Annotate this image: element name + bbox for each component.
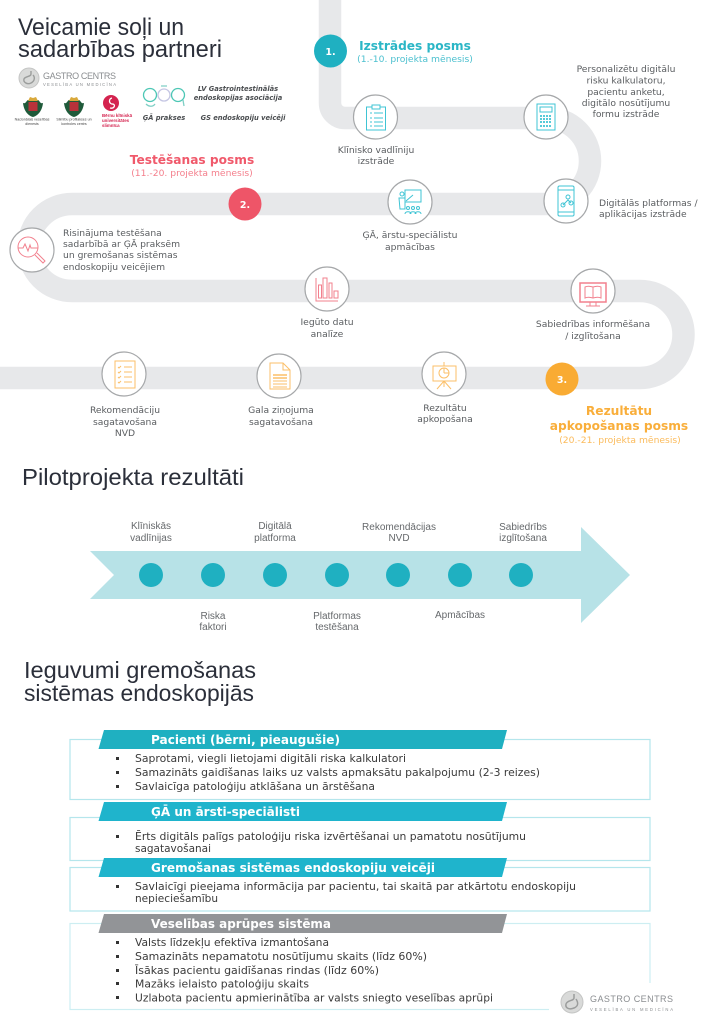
label: training: apmācības <box>385 242 435 253</box>
timeline labels: Apmācības <box>435 610 485 621</box>
title: steps and partners: Veicamie soļi un <box>18 14 184 41</box>
partner caption: association: LV Gastrointestinālās <box>198 85 278 93</box>
banner: healthcare system: Veselības aprūpes sistēma <box>151 916 331 931</box>
label: results summary: Rezultātu <box>423 403 467 414</box>
timeline labels: Klīniskās <box>131 521 171 532</box>
list: GPs and specialists: sagatavošanai <box>135 843 211 855</box>
label: clinical guidelines: izstrāde <box>358 156 395 167</box>
panel: patients <box>70 730 650 800</box>
phase 1 marker: 1. <box>325 47 336 58</box>
panel: GPs and specialists <box>70 802 650 860</box>
phase 1 marker <box>314 34 347 68</box>
list: patients: Samazināts gaidīšanas laiks uz valsts apmaksātu pakalpojumu (2-3 reizes) <box>135 767 540 779</box>
panel: endoscopists <box>70 858 650 911</box>
timeline labels: Sabiedrībs <box>499 522 547 533</box>
label: public education: / izglītošana <box>565 331 621 342</box>
label: results summary <box>417 403 473 425</box>
heading: benefits: sistēmas endoskopijās <box>24 680 254 706</box>
banner: endoscopists <box>98 858 507 877</box>
label: clinical guidelines: Klīnisko vadlīniju <box>338 145 414 156</box>
timeline labels <box>130 521 547 633</box>
label: public education: Sabiedrības informēšana <box>536 319 650 330</box>
icon: bar chart analysis <box>305 267 349 311</box>
partner caption: endoscopists: GS endoskopiju veicēji <box>201 114 286 122</box>
phase 3 heading: apkopošanas posms <box>550 419 688 433</box>
label: solution testing <box>63 228 180 273</box>
icon: clinical guidelines <box>354 95 398 139</box>
label: recommendations: Rekomendāciju <box>90 405 160 416</box>
phase 2 heading: Testēšanas posms <box>130 153 254 167</box>
banner: GPs and specialists: ĢĀ un ārsti-speciālisti <box>151 804 300 819</box>
logo: Slimību profilakses un kontroles centrs: Slimību profilakses un <box>56 118 92 122</box>
logo: Nacionālais veselības dienests: dienests <box>25 122 39 126</box>
phase 2 heading: (11.-20. projekta mēnesis) <box>131 168 253 179</box>
logo: Bērnu klīniskā universitātes slimnīca: Bērnu klīniskā <box>102 113 133 118</box>
list: GPs and specialists <box>116 830 526 855</box>
logo: Gastro Centrs footer: VESELĪBA UN MEDICĪNA <box>590 1007 673 1012</box>
label: data analysis: analīze <box>311 329 344 340</box>
logo: Bērnu klīniskā universitātes slimnīca <box>102 95 133 128</box>
list: endoscopists <box>116 881 576 905</box>
logo: Slimību profilakses un kontroles centrs <box>56 97 92 126</box>
logo: Gastro Centrs: GASTRO CENTRS <box>43 71 116 81</box>
label: data analysis: Iegūto datu <box>300 317 354 328</box>
label: data analysis <box>300 317 354 340</box>
logo: Bērnu klīniskā universitātes slimnīca: universitātes <box>102 118 130 123</box>
list: patients <box>116 753 540 793</box>
list: healthcare system <box>116 937 493 1004</box>
list: endoscopists: nepieciešamību <box>135 893 218 905</box>
label: risk calculator: pacientu anketu, <box>587 87 665 98</box>
list: healthcare system: Valsts līdzekļu efektīva izmantošana <box>135 937 329 949</box>
icon: results presentation <box>422 352 466 396</box>
phase 1 heading: (1.-10. projekta mēnesis) <box>357 54 473 65</box>
timeline labels: Riska <box>200 611 226 622</box>
label: training <box>362 230 458 253</box>
label: recommendations: NVD <box>115 428 135 439</box>
partner caption: association: endoskopijas asociācija <box>194 94 283 102</box>
label: final report: Gala ziņojuma <box>248 405 314 416</box>
label: solution testing: endoskopiju veicējiem <box>63 262 165 273</box>
label: public education <box>536 319 650 342</box>
logo: Gastro Centrs <box>19 68 116 88</box>
list: healthcare system: Mazāks ielaisto patoloģiju skaits <box>135 978 309 990</box>
logo: Nacionālais veselības dienests: Nacionālais veselības <box>15 118 50 122</box>
title: steps and partners: sadarbības partneri <box>18 36 222 63</box>
timeline labels: platforma <box>254 533 296 544</box>
banner: endoscopists: Gremošanas sistēmas endoskopiju veicēji <box>151 860 435 875</box>
icon: recommendations checklist <box>102 352 146 396</box>
phase 2 marker: 2. <box>240 200 250 211</box>
partner logos <box>15 68 286 128</box>
timeline labels: Platformas <box>313 611 361 622</box>
phase 3 heading <box>550 404 688 446</box>
phase 3 marker: 3. <box>557 375 567 386</box>
heading: benefits: Ieguvumi gremošanas <box>24 657 256 683</box>
timeline arrow <box>90 527 630 623</box>
logo: GA rings <box>144 86 184 106</box>
partner caption: association <box>194 85 283 102</box>
timeline labels: Digitālā <box>258 521 292 532</box>
logo: Gastro Centrs footer: GASTRO CENTRS <box>590 994 673 1004</box>
label: solution testing: un gremošanas sistēmas <box>63 250 178 261</box>
label: final report <box>248 405 314 428</box>
label: recommendations <box>90 405 160 439</box>
list: endoscopists: Savlaicīgi pieejama informācija par pacientu, tai skaitā par atkārtotu endoskopiju <box>135 881 576 893</box>
heading: pilot results: Pilotprojekta rezultāti <box>22 464 244 490</box>
title: steps and partners <box>18 14 222 63</box>
panel: healthcare system <box>70 914 650 1010</box>
icon: public education monitor <box>571 269 615 313</box>
partner caption: GP practices: ĢĀ prakses <box>143 113 185 122</box>
banner: patients <box>98 730 507 749</box>
logo: Gastro Centrs footer <box>549 983 689 1015</box>
phase 1 heading <box>357 39 473 65</box>
label: digital platform: Digitālās platformas / <box>599 198 699 209</box>
list: healthcare system: Īsākas pacientu gaidīšanas rindas (līdz 60%) <box>135 964 379 977</box>
label: recommendations: sagatavošana <box>93 417 157 428</box>
icon: final report <box>257 354 301 398</box>
list: patients: Savlaicīga patoloģiju atklāšana un ārstēšana <box>135 781 375 793</box>
phase 3 marker <box>546 362 578 396</box>
timeline labels: vadlīnijas <box>130 533 172 544</box>
label: clinical guidelines <box>338 145 414 167</box>
label: risk calculator <box>577 64 675 120</box>
logo: Slimību profilakses un kontroles centrs: kontroles centrs <box>61 122 87 126</box>
label: training: ĢĀ, ārstu-speciālistu <box>362 230 458 241</box>
list: patients: Saprotami, viegli lietojami digitāli riska kalkulatori <box>135 753 406 765</box>
list: healthcare system: Uzlabota pacientu apmierinātība ar valsts sniegto veselības aprūpi <box>135 992 493 1004</box>
timeline labels: faktori <box>199 622 227 633</box>
timeline labels: testēšana <box>315 622 359 633</box>
phase 3 heading: Rezultātu <box>586 404 652 418</box>
icon: calculator <box>524 95 568 139</box>
label: risk calculator: risku kalkulatoru, <box>586 76 666 86</box>
banner: healthcare system <box>98 914 507 933</box>
icon: phone platform <box>544 179 588 223</box>
label: solution testing: sadarbībā ar ĢĀ praksēm <box>63 239 180 250</box>
phase 2 heading <box>130 153 254 179</box>
logo: Bērnu klīniskā universitātes slimnīca: slimnīca <box>102 123 120 128</box>
label: risk calculator: digitālo nosūtījumu <box>582 98 670 109</box>
timeline dots <box>139 563 533 587</box>
label: risk calculator: Personalizētu digitālu <box>577 64 675 75</box>
phase 2 marker <box>228 188 262 220</box>
logo: Gastro Centrs: VESELĪBA UN MEDICĪNA <box>43 82 116 87</box>
timeline labels: NVD <box>388 533 410 544</box>
label: risk calculator: formu izstrāde <box>593 109 660 120</box>
list: GPs and specialists: Ērts digitāls palīgs patoloģiju riska izvērtēšanai un pamatotu nosūtījumu <box>135 830 526 843</box>
label: solution testing: Risinājuma testēšana <box>63 228 162 239</box>
timeline labels: izglītošana <box>499 533 547 544</box>
phase 3 heading: (20.-21. projekta mēnesis) <box>559 435 681 446</box>
timeline labels: Rekomendācijas <box>362 522 436 533</box>
phase 1 heading: Izstrādes posms <box>359 39 471 53</box>
label: final report: sagatavošana <box>249 417 313 428</box>
heading: benefits <box>24 657 256 706</box>
label: results summary: apkopošana <box>417 414 473 425</box>
roadmap road <box>0 0 684 378</box>
icon: training <box>388 180 432 224</box>
label: digital platform <box>599 198 699 220</box>
label: digital platform: aplikācijas izstrāde <box>599 209 687 220</box>
icon: testing magnifier <box>10 228 54 272</box>
logo: Nacionālais veselības dienests <box>15 97 50 126</box>
banner: GPs and specialists <box>98 802 507 821</box>
list: healthcare system: Samazināts nepamatotu nosūtījumu skaits (līdz 60%) <box>135 951 427 963</box>
banner: patients: Pacienti (bērni, pieaugušie) <box>151 732 340 747</box>
